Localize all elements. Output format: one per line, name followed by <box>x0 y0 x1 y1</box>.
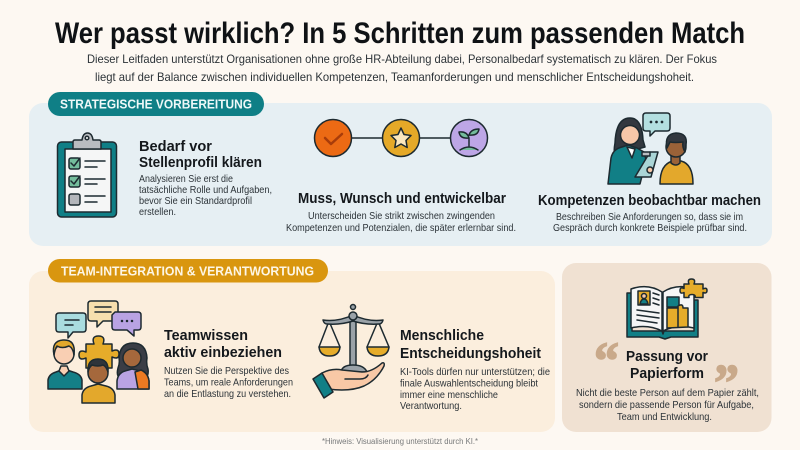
intro text: Dieser Leitfaden unterstützt Organisationen ohne große HR-Abteilung dabei, Personalbedarf systematisch zu klären. Der Fokus <box>87 52 717 66</box>
closing quotation mark: ” <box>714 355 739 412</box>
step: Teamwissen aktiv einbeziehen: Nutzen Sie die Perspektive des <box>164 365 289 377</box>
step: Menschliche Entscheidungshoheit: Menschliche <box>400 327 484 344</box>
step: Kompetenzen beobachtbar machen: Kompetenzen beobachtbar machen <box>538 192 761 209</box>
step: Menschliche Entscheidungshoheit: Verantwortung. <box>400 400 462 412</box>
step: Kompetenzen beobachtbar machen <box>538 192 761 234</box>
step: Menschliche Entscheidungshoheit <box>400 327 550 412</box>
heading and description <box>576 348 759 423</box>
step: Bedarf vor Stellenprofil klären <box>139 138 272 218</box>
step: Muss, Wunsch und entwickelbar: Kompetenzen und Potenzialen, die später erlernbar sind. <box>286 222 516 234</box>
step: Teamwissen aktiv einbeziehen: an die Entlastung zu verstehen. <box>164 388 291 400</box>
step: Menschliche Entscheidungshoheit: Entscheidungshoheit <box>400 345 541 362</box>
heading and description: Papierform <box>630 365 704 382</box>
step: Muss, Wunsch und entwickelbar: Muss, Wunsch und entwickelbar <box>298 190 506 207</box>
step: Bedarf vor Stellenprofil klären: bevor Sie ein Standardprofil <box>139 195 252 207</box>
step: Menschliche Entscheidungshoheit: immer eine menschliche <box>400 389 498 401</box>
section pill: Team-Integration und Verantwortung <box>48 259 328 282</box>
icon: three linked circles <box>314 120 488 156</box>
step: Teamwissen aktiv einbeziehen: aktiv einbeziehen <box>164 344 282 361</box>
step: Muss, Wunsch und entwickelbar <box>286 190 516 234</box>
step: Teamwissen aktiv einbeziehen <box>164 327 293 400</box>
section pill: strategische Vorbereitung: STRATEGISCHE VORBEREITUNG <box>60 98 252 112</box>
step: Teamwissen aktiv einbeziehen: Teams, um reale Anforderungen <box>164 376 293 388</box>
panel: Team-Integration und Verantwortung <box>29 259 555 432</box>
heading and description: Nicht die beste Person auf dem Papier zählt, <box>576 387 759 399</box>
step: Kompetenzen beobachtbar machen: Gespräch durch konkrete Beispiele prüfbar sind. <box>553 222 747 234</box>
icon: open book with puzzle <box>627 279 707 339</box>
section pill: Team-Integration und Verantwortung: TEAM-INTEGRATION & VERANTWORTUNG <box>61 264 314 278</box>
step: Teamwissen aktiv einbeziehen: Teamwissen <box>164 327 248 344</box>
section pill: strategische Vorbereitung <box>48 92 264 116</box>
step: Muss, Wunsch und entwickelbar: Unterscheiden Sie strikt zwischen zwingenden <box>308 210 495 222</box>
icon: team with speech bubbles and puzzle <box>48 301 149 403</box>
step: Bedarf vor Stellenprofil klären: erstellen. <box>139 206 176 218</box>
panel: Passung vor Papierform <box>562 263 772 432</box>
step: Kompetenzen beobachtbar machen: Beschreiben Sie Anforderungen so, dass sie im <box>556 211 743 223</box>
intro text <box>87 52 717 84</box>
heading and description: Passung vor <box>626 348 708 365</box>
step: Menschliche Entscheidungshoheit: KI-Tools dürfen nur unterstützen; die <box>400 366 550 378</box>
step: Bedarf vor Stellenprofil klären: tatsächliche Rolle und Aufgaben, <box>139 184 272 196</box>
icon: scales on a hand <box>313 304 389 398</box>
heading and description: sondern die passende Person für Aufgabe, <box>579 399 754 411</box>
panel: strategische Vorbereitung <box>29 92 772 246</box>
step: Menschliche Entscheidungshoheit: finale Auswahlentscheidung bleibt <box>400 378 538 390</box>
footnote: *Hinweis: Visualisierung unterstützt durch KI.* <box>322 437 478 446</box>
step: Bedarf vor Stellenprofil klären: Stellenprofil klären <box>139 154 262 171</box>
icon: interview of two people <box>608 113 693 184</box>
intro text: liegt auf der Balance zwischen individuellen Kompetenzen, Teamanforderungen und menschlicher Entscheidungshoheit. <box>95 70 694 84</box>
step: Bedarf vor Stellenprofil klären: Analysieren Sie erst die <box>139 173 233 185</box>
step: Bedarf vor Stellenprofil klären: Bedarf vor <box>139 138 212 155</box>
icon: clipboard checklist <box>58 133 116 217</box>
opening quotation mark: “ <box>594 333 619 390</box>
heading and description: Team und Entwicklung. <box>617 411 712 423</box>
